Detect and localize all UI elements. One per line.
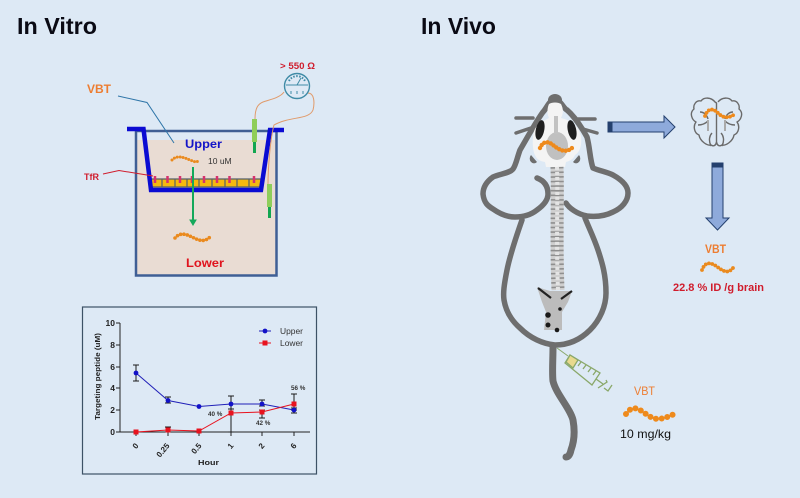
electrode right	[267, 184, 272, 218]
transport arrow	[190, 167, 196, 225]
membrane cell layer	[151, 179, 261, 187]
electrode left	[252, 119, 257, 153]
x axis: 0.5	[189, 441, 204, 456]
icon: ohmmeter	[284, 74, 310, 98]
legend: Lower	[280, 339, 303, 348]
VBT leader line	[118, 96, 174, 143]
series: upper	[134, 371, 296, 412]
error bars	[133, 365, 297, 432]
electrode wires	[255, 92, 314, 184]
y axis: 2	[110, 405, 115, 415]
annotations: 40 %	[208, 411, 223, 418]
panel: mouse	[483, 94, 628, 457]
label: dose: 10 mg/kg	[620, 427, 671, 441]
label: 10 uM: 10 uM	[208, 156, 232, 166]
x axis: 0	[131, 441, 141, 451]
label: TfR: TfR	[84, 172, 99, 182]
x axis: 1	[226, 441, 236, 451]
title: In Vivo: In Vivo	[421, 13, 496, 39]
peptide upper	[172, 157, 199, 162]
title: In Vitro: In Vitro	[17, 13, 97, 39]
arrow: head to brain	[608, 116, 675, 138]
icon: syringe	[557, 348, 612, 391]
y axis: 8	[110, 340, 115, 350]
TfR leader line	[103, 170, 153, 176]
callout: VBT dose	[620, 384, 674, 441]
outer well	[136, 131, 276, 276]
callout: brain uptake	[673, 242, 764, 294]
x axis: 6	[289, 441, 299, 451]
pelvis	[537, 287, 572, 332]
legend: Upper	[280, 327, 303, 336]
annotations: 42 %	[256, 420, 271, 427]
label: resistance: > 550 Ω	[280, 61, 315, 72]
icon: brain	[691, 98, 742, 146]
mouse outline	[483, 100, 628, 457]
x axis: Hour	[198, 458, 219, 467]
panel: line chart	[82, 307, 316, 474]
peptide in head	[540, 142, 572, 151]
y axis: 4	[110, 383, 115, 393]
peptide result	[702, 263, 733, 272]
skull	[533, 102, 581, 167]
label: Lower: Lower	[186, 256, 224, 270]
x axis	[120, 432, 310, 467]
x axis: 0.25	[155, 441, 172, 459]
insert	[127, 129, 284, 190]
label: VBT: VBT	[634, 384, 656, 398]
y axis: 0	[110, 427, 115, 437]
y axis: 10	[106, 318, 115, 328]
label: VBT: VBT	[87, 82, 112, 96]
spine	[557, 167, 558, 290]
panel: transwell diagram	[84, 61, 315, 276]
y axis: Targeting peptide (uM)	[95, 333, 102, 420]
y axis	[95, 318, 120, 437]
label: uptake value: 22.8 % ID /g brain	[673, 282, 764, 294]
x axis: 2	[257, 441, 267, 451]
TfR receptors	[155, 176, 254, 183]
legend	[259, 327, 303, 348]
y axis: 6	[110, 362, 115, 372]
peptide in brain	[705, 110, 735, 117]
annotations	[208, 385, 306, 427]
chart frame	[82, 307, 316, 474]
label: VBT: VBT	[705, 242, 727, 256]
peptide lower	[175, 234, 210, 240]
label: Upper: Upper	[185, 137, 222, 151]
annotations: 56 %	[291, 385, 306, 392]
arrow: brain to result	[706, 163, 729, 230]
nose cap	[548, 94, 562, 106]
neck blobs	[530, 155, 580, 163]
peptide dose	[626, 408, 674, 419]
series: lower	[134, 402, 296, 434]
